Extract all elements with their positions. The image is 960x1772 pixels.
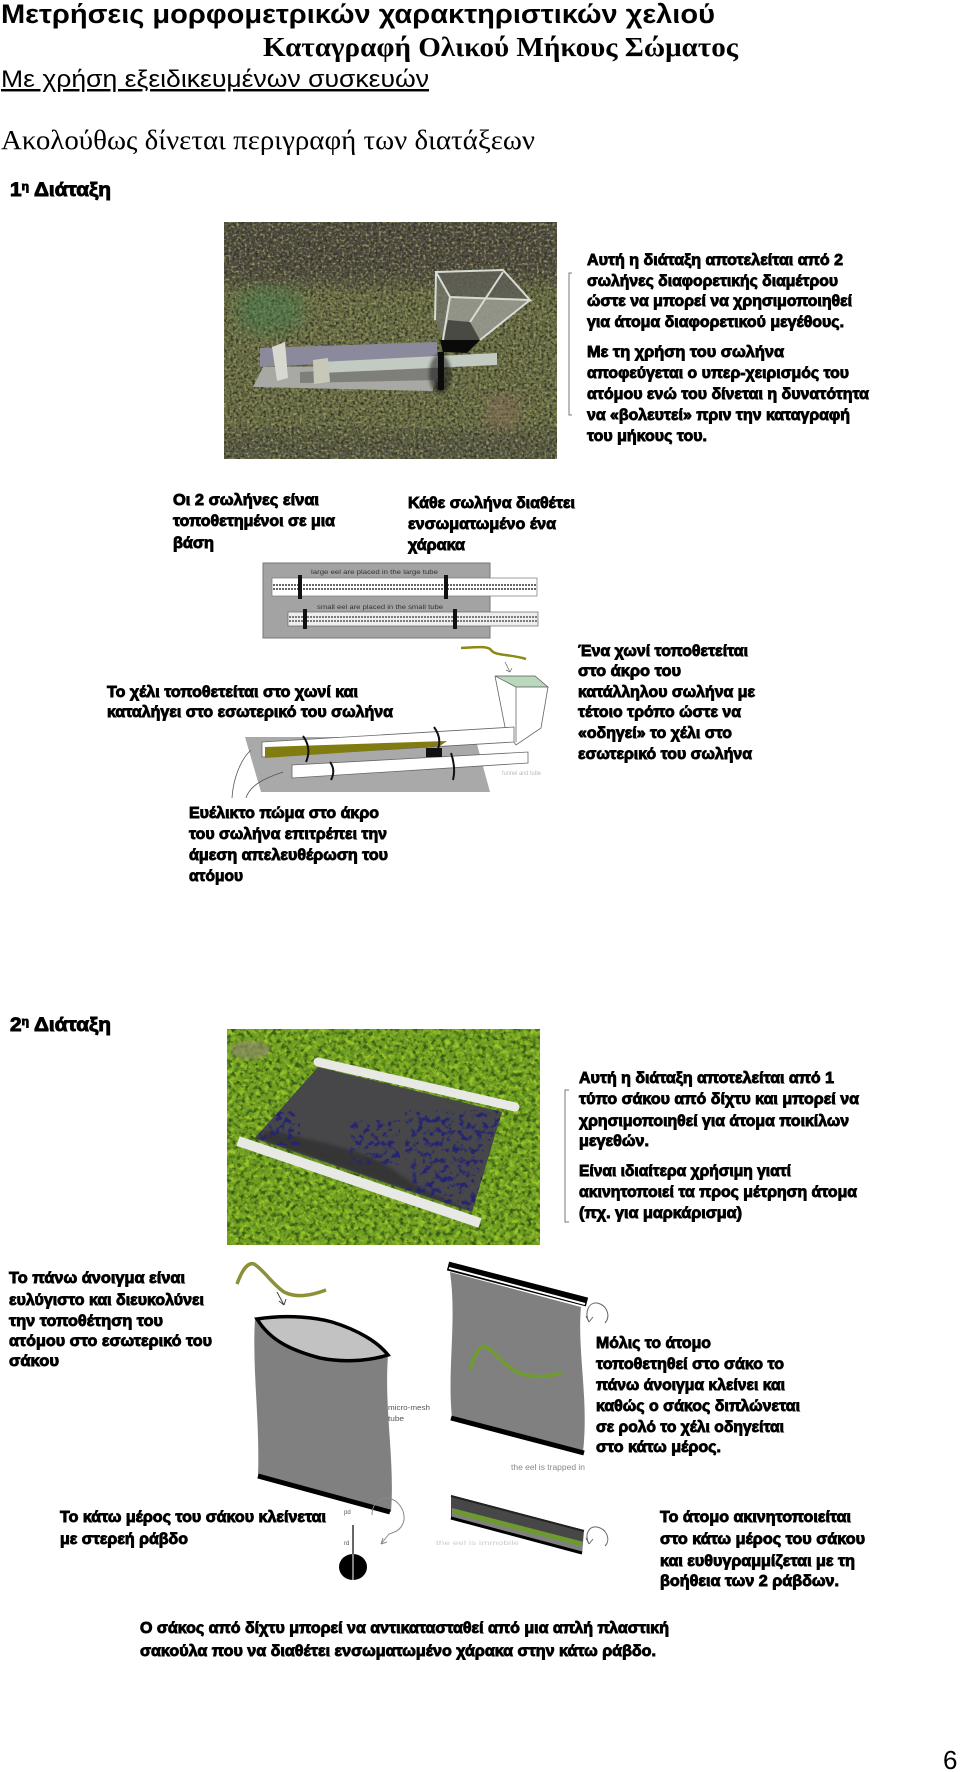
- text: arrangement 1 description: ατόμου ενώ του δίνεται η δυνατότητα: [587, 386, 869, 403]
- heading: arrangement 2: η: [22, 1016, 29, 1028]
- text: funnel description: τέτοιο τρόπο ώστε να: [578, 704, 741, 721]
- text: two tubes on a base: Οι 2 σωλήνες είναι: [173, 492, 319, 509]
- intro line: Ακολούθως δίνεται περιγραφή των διατάξεων: [1, 125, 535, 155]
- diagram: sack closed by rolling with eel inside: the eel is trapped in: [511, 1463, 585, 1472]
- text: arrangement 1 description: Με τη χρήση του σωλήνα: [587, 344, 784, 361]
- text: eel immobilised: Το άτομο ακινητοποιείται: [660, 1509, 851, 1526]
- text: eel immobilised: και ευθυγραμμίζεται με τη: [660, 1553, 855, 1570]
- diagram: top view of tubes with rulers: small eel are placed in the small tube: [317, 605, 444, 611]
- text: top opening: σάκου: [9, 1353, 59, 1370]
- text: top opening: [9, 1270, 212, 1370]
- diagram: rod cross section with rotation arrow: rd: [344, 1541, 349, 1547]
- diagram: rolled sack with straightened eel: [436, 1495, 608, 1554]
- heading: arrangement 2: Διάταξη: [29, 1015, 111, 1036]
- text: arrangement 1 description: [569, 252, 869, 445]
- text: funnel description: Ένα χωνί τοποθετείται: [578, 643, 748, 660]
- diagram: open mesh sack with eel: tube: [388, 1416, 404, 1423]
- text: eel immobilised: στο κάτω μέρος του σάκου: [660, 1531, 865, 1548]
- text: funnel description: εσωτερικό του σωλήνα: [578, 746, 752, 763]
- text: bottom closes with a rod: [60, 1509, 326, 1548]
- text: eel immobilised: [660, 1509, 865, 1590]
- text: top opening: ατόμου στο εσωτερικό του: [9, 1333, 212, 1350]
- text: bottom closes with a rod: με στερεή ράβδο: [60, 1531, 188, 1548]
- text: funnel description: «οδηγεί» το χέλι στο: [578, 725, 732, 742]
- text: each tube has a ruler: [408, 495, 575, 554]
- text: two tubes on a base: τοποθετημένοι σε μια: [173, 513, 335, 530]
- heading: arrangement 2: 2: [10, 1015, 21, 1036]
- text: once the eel is placed: τοποθετηθεί στο σάκο το: [596, 1356, 784, 1373]
- text: plastic bag note: σακούλα που να διαθέτει ενσωματωμένο χάρακα στην κάτω ράβδο.: [140, 1643, 656, 1660]
- diagram: rod cross section with rotation arrow: [339, 1498, 404, 1580]
- text: arrangement 1 description: για άτομα διαφορετικού μεγέθους.: [587, 314, 844, 331]
- text: once the eel is placed: σε ρολό το χέλι οδηγείται: [596, 1419, 784, 1436]
- text: eel placed in funnel: Το χέλι τοποθετείται στο χωνί και: [107, 684, 358, 701]
- text: arrangement 2 description: (πχ. για μαρκάρισμα): [579, 1205, 742, 1222]
- text: funnel description: [578, 643, 755, 763]
- text: arrangement 2 description: Αυτή η διάταξη αποτελείται από 1: [579, 1070, 834, 1087]
- text: arrangement 2 description: ακινητοποιεί τα προς μέτρηση άτομα: [579, 1184, 857, 1201]
- text: once the eel is placed: καθώς ο σάκος διπλώνεται: [596, 1398, 800, 1415]
- diagram: rolled sack with straightened eel: the eel is immobile: [436, 1541, 520, 1547]
- diagram: top view of tubes with rulers: [263, 563, 538, 638]
- photo: tube device on grass: [224, 222, 557, 459]
- text: flexible stopper: [189, 805, 388, 885]
- text: once the eel is placed: στο κάτω μέρος.: [596, 1439, 721, 1456]
- text: arrangement 1 description: αποφεύγεται ο υπερ-χειρισμός του: [587, 365, 849, 382]
- text: arrangement 2 description: τύπο σάκου από δίχτυ και μπορεί να: [579, 1091, 859, 1108]
- text: plastic bag note: Ο σάκος από δίχτυ μπορεί να αντικατασταθεί από μια απλή πλαστική: [140, 1620, 669, 1637]
- text: arrangement 1 description: να «βολευτεί» πριν την καταγραφή: [587, 407, 850, 424]
- text: flexible stopper: Ευέλικτο πώμα στο άκρο: [189, 805, 379, 822]
- diagram: top view of tubes with rulers: large eel are placed in the large tube: [311, 570, 439, 576]
- text: arrangement 1 description: ώστε να μπορεί να χρησιμοποιηθεί: [587, 293, 852, 310]
- diagram: rod cross section with rotation arrow: pd: [344, 1510, 351, 1516]
- text: each tube has a ruler: χάρακα: [408, 537, 465, 554]
- text: arrangement 1 description: Αυτή η διάταξη αποτελείται από 2: [587, 252, 843, 269]
- diagram: sack closed by rolling with eel inside: [448, 1266, 608, 1472]
- diagram: open mesh sack with eel: [237, 1264, 430, 1512]
- text: top opening: την τοποθέτηση του: [9, 1313, 163, 1330]
- text: eel immobilised: βοήθεια των 2 ράβδων.: [660, 1573, 839, 1590]
- underlined heading: Με χρήση εξειδικευμένων συσκευών: [1, 66, 429, 93]
- text: two tubes on a base: βάση: [173, 535, 214, 552]
- text: eel placed in funnel: [107, 684, 393, 721]
- text: top opening: Το πάνω άνοιγμα είναι: [9, 1270, 185, 1287]
- heading: arrangement 1: Διάταξη: [29, 180, 111, 201]
- text: arrangement 1 description: του μήκους του.: [587, 428, 707, 445]
- heading: arrangement 1: 1: [10, 180, 21, 201]
- text: arrangement 2 description: Είναι ιδιαίτερα χρήσιμη γιατί: [579, 1163, 791, 1180]
- subtitle: Καταγραφή Ολικού Μήκους Σώματος: [263, 32, 739, 62]
- text: arrangement 1 description: σωλήνες διαφορετικής διαμέτρου: [587, 273, 838, 290]
- text: eel placed in funnel: καταλήγει στο εσωτερικό του σωλήνα: [107, 704, 393, 721]
- text: once the eel is placed: πάνω άνοιγμα κλείνει και: [596, 1377, 785, 1394]
- diagram: tubes with funnel and eel: [232, 647, 548, 798]
- text: each tube has a ruler: ενσωματωμένο ένα: [408, 516, 556, 533]
- text: once the eel is placed: Μόλις το άτομο: [596, 1335, 711, 1352]
- text: funnel description: στο άκρο του: [578, 663, 681, 680]
- text: arrangement 2 description: χρησιμοποιηθεί για άτομα ποικίλων: [579, 1113, 849, 1130]
- text: arrangement 2 description: [565, 1070, 859, 1222]
- diagram: tubes with funnel and eel: funnel and tube: [502, 771, 542, 777]
- text: two tubes on a base: [173, 492, 335, 552]
- diagram: open mesh sack with eel: micro-mesh: [388, 1405, 430, 1412]
- text: top opening: ευλύγιστο και διευκολύνει: [9, 1292, 204, 1309]
- text: once the eel is placed: [596, 1335, 800, 1456]
- photo: mesh sack on grass: [227, 1029, 540, 1245]
- text: flexible stopper: του σωλήνα επιτρέπει την: [189, 826, 387, 843]
- text: funnel description: κατάλληλου σωλήνα με: [578, 684, 755, 701]
- text: flexible stopper: ατόμου: [189, 868, 243, 885]
- heading: arrangement 1: η: [22, 181, 29, 193]
- text: plastic bag note: [140, 1620, 669, 1660]
- text: arrangement 2 description: μεγεθών.: [579, 1133, 649, 1150]
- text: each tube has a ruler: Κάθε σωλήνα διαθέτει: [408, 495, 575, 512]
- text: bottom closes with a rod: Το κάτω μέρος του σάκου κλείνεται: [60, 1509, 326, 1526]
- text: flexible stopper: άμεση απελευθέρωση του: [189, 847, 388, 864]
